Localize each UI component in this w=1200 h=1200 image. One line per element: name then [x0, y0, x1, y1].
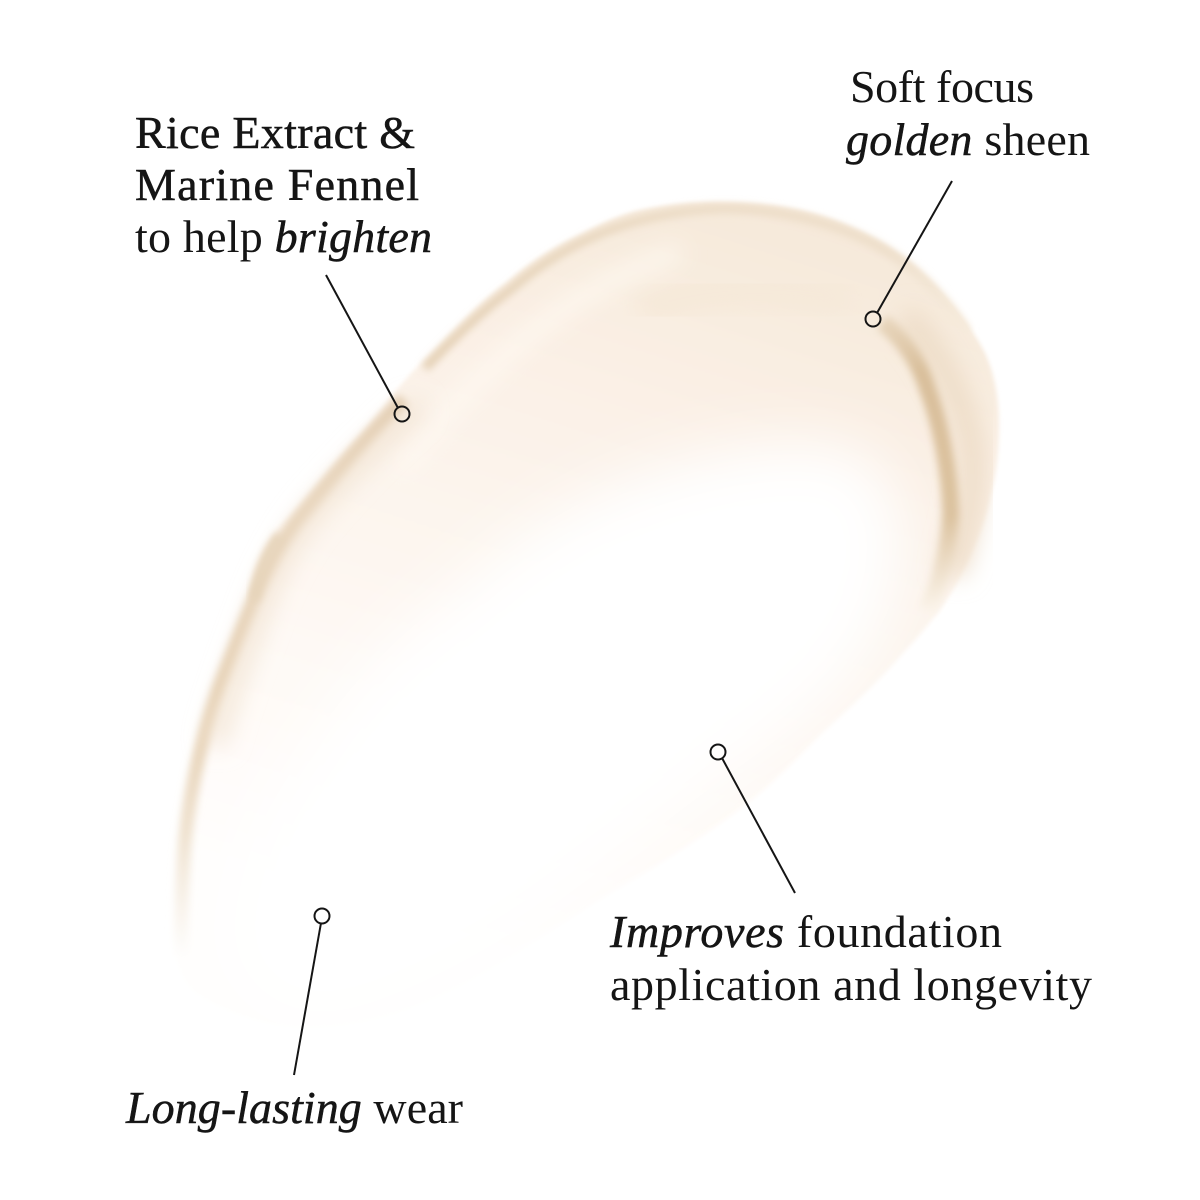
callout text: brighten: Marine Fennel: [135, 159, 419, 210]
callout text: foundation: application and longevity: [610, 959, 1092, 1010]
callout text: golden sheen: Soft focus: [850, 61, 1034, 112]
callout text: brighten: to help brighten: [135, 211, 432, 262]
cream swatch: [174, 202, 999, 1027]
leader line: foundation: [710, 744, 795, 893]
callout text: foundation: Improves foundation: [609, 906, 1002, 957]
callout text: foundation: [609, 906, 1092, 1010]
callout: long-lasting: [125, 908, 463, 1133]
callout text: golden sheen: [846, 61, 1090, 165]
callout: foundation: [609, 744, 1092, 1010]
leader line: long-lasting: [294, 908, 330, 1075]
leader line: golden sheen: [866, 181, 952, 326]
callout text: golden sheen: golden sheen: [846, 114, 1090, 165]
leader line: brighten: [326, 275, 410, 422]
callout text: brighten: [135, 107, 432, 262]
callout: Rice Extract and Marine Fennel: [135, 107, 432, 422]
callout text: long-lasting: Long-lasting wear: [125, 1082, 463, 1133]
callout text: brighten: Rice Extract &: [135, 107, 415, 158]
callout: golden sheen: [846, 61, 1090, 326]
